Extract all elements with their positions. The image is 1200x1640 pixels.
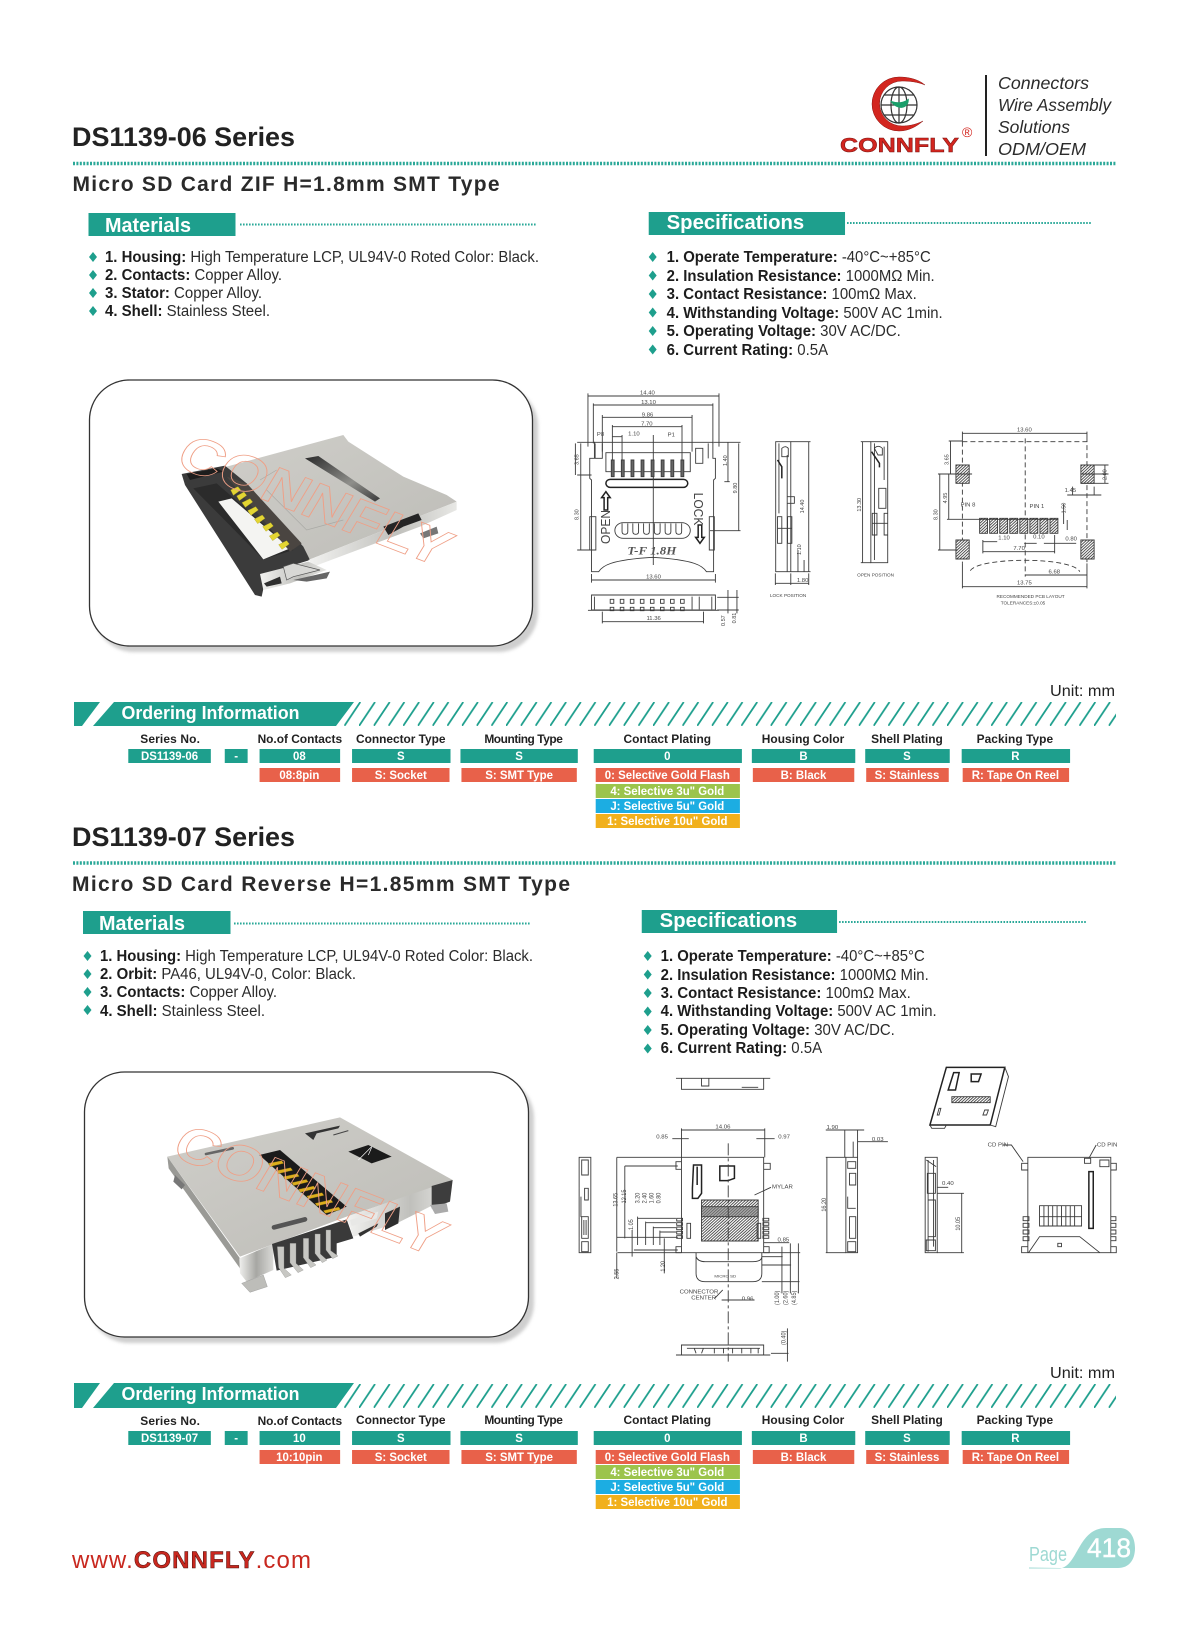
icon: globe — [881, 87, 917, 123]
specification list: 4. Withstanding Voltage: 500V AC 1min. — [661, 1003, 937, 1020]
pcb layout: 0.10 — [1033, 535, 1045, 541]
top view: 1.10 — [628, 431, 640, 437]
main top view: 0.85 — [778, 1238, 789, 1244]
code row: 08 — [293, 751, 306, 763]
connector photo — [182, 435, 457, 597]
column headers: Mounting Type — [484, 1413, 563, 1427]
frame — [90, 380, 532, 646]
specification list: 3. Contact Resistance: 100mΩ Max. — [661, 985, 911, 1002]
main top view: 0.97 — [778, 1135, 790, 1140]
side view: lock position: 14.40 — [800, 500, 806, 513]
option row: S: SMT Type — [485, 1452, 553, 1464]
option row — [260, 1450, 1069, 1464]
specification list: 5. Operating Voltage: 30V AC/DC. — [667, 323, 901, 340]
code row: 0 — [664, 751, 670, 763]
logo: Connfly — [840, 77, 973, 157]
specification list: 6. Current Rating: 0.5A — [667, 342, 829, 359]
top view: P1 — [668, 433, 675, 439]
column headers: Connector Type — [356, 732, 446, 746]
pcb layout: 13.75 — [1017, 581, 1032, 587]
pcb layout: TOLERANCES:±0.05 — [1001, 601, 1046, 606]
technical drawing 2 — [579, 1067, 1117, 1362]
plating options: J: Selective 5u" Gold — [610, 801, 724, 813]
column headers: Series No. — [140, 1414, 200, 1428]
top view: 8.30 — [574, 509, 581, 520]
left side view — [579, 1157, 591, 1253]
bullets — [89, 252, 97, 316]
side view: open position: OPEN POSITION — [857, 573, 894, 578]
unit label 2: Unit: mm — [1050, 1365, 1115, 1382]
material list: 2. Contacts: Copper Alloy. — [105, 267, 282, 284]
watermark: CONNFLY — [167, 425, 463, 578]
option row: 10:10pin — [276, 1452, 323, 1464]
page label: Page — [1029, 1544, 1067, 1566]
panel: product photo 2 — [84, 1072, 534, 1343]
pcb layout: 8.30 — [933, 509, 940, 520]
pcb layout: 1.50 — [1061, 503, 1067, 513]
main top view: 3.20 — [635, 1193, 642, 1203]
subtitle: Micro SD Card Reverse H=1.85mm SMT Type — [72, 873, 570, 896]
footer website: www.CONNFLY.com — [71, 1547, 311, 1574]
main top view: CONNECTOR — [680, 1290, 718, 1295]
top view: 13.10 — [641, 400, 656, 406]
front view — [588, 590, 739, 626]
panel: specifications 2 — [642, 910, 1086, 1057]
cross-section view — [925, 1157, 964, 1253]
top view: 9.86 — [642, 412, 653, 418]
code row: S — [903, 1433, 911, 1445]
column headers: Packing Type — [977, 732, 1054, 746]
cross-section view: 10.05 — [956, 1217, 962, 1231]
main top view: 12.15 — [622, 1190, 628, 1203]
frame shadow — [89, 1078, 534, 1343]
icon: green leaf — [892, 100, 908, 107]
pcb layout: 1.10 — [998, 535, 1010, 541]
material list: 4. Shell: Stainless Steel. — [105, 303, 270, 320]
dotted rule — [73, 162, 1116, 165]
technical drawing 1 — [574, 390, 1108, 626]
side view: lock position — [770, 442, 811, 598]
main top view: MICRO SD — [714, 1274, 736, 1278]
pcb layout: 2.00 — [1102, 469, 1108, 480]
panel: materials 1 — [88, 213, 539, 320]
tagline — [998, 73, 1112, 159]
column headers: No.of Contacts — [258, 732, 342, 746]
option row: B: Black — [781, 1452, 827, 1464]
ordering banner 2: Ordering Information — [122, 1383, 300, 1404]
plating options: 4: Selective 3u" Gold — [610, 1467, 724, 1479]
top view: 7.70 — [641, 421, 653, 427]
code row: 0 — [664, 1433, 670, 1445]
option row: R: Tape On Reel — [972, 770, 1059, 782]
heading: materials: Materials — [105, 215, 191, 237]
registered mark: ® — [962, 124, 973, 140]
specification list: 2. Insulation Resistance: 1000MΩ Min. — [667, 268, 935, 285]
title: DS1139-06 Series: DS1139-06 Series — [72, 122, 295, 152]
column headers: Shell Plating — [871, 1413, 943, 1427]
heading: specifications: Specifications — [660, 910, 797, 932]
pcb layout: RECOMMENDED PCB LAYOUT — [996, 594, 1065, 599]
code row: S — [515, 751, 523, 763]
ordering banner 1: Ordering Information — [122, 702, 300, 723]
material list: 1. Housing: High Temperature LCP, UL94V-0 Roted Color: Black. — [100, 948, 533, 965]
right side view — [822, 1125, 888, 1253]
page tab — [1029, 1528, 1135, 1568]
main top view: 2.55 — [614, 1269, 621, 1279]
top view: LOCK — [691, 493, 705, 526]
code row: B — [799, 751, 808, 763]
material list: 3. Contacts: Copper Alloy. — [100, 984, 277, 1001]
main top view: 1.20 — [661, 1261, 667, 1272]
specification list: 6. Current Rating: 0.5A — [661, 1040, 823, 1057]
main top view: 14.06 — [715, 1125, 731, 1130]
main top view: CENTER — [691, 1296, 716, 1302]
card direction labels: OPEN — [599, 510, 613, 544]
code row: - — [234, 751, 238, 763]
dimensions — [575, 393, 741, 583]
frame shadow — [94, 386, 538, 652]
frame — [84, 1072, 528, 1337]
heading: materials — [83, 911, 230, 935]
specification list: 5. Operating Voltage: 30V AC/DC. — [661, 1022, 895, 1039]
material list — [105, 249, 539, 320]
side view: lock position: LOCK POSITION — [770, 593, 806, 598]
main top view: (2.60) — [783, 1291, 790, 1305]
main top view: (1.00) — [775, 1291, 781, 1305]
code row: R — [1011, 751, 1020, 763]
cross-section view: 0.40 — [942, 1181, 954, 1187]
tagline: Solutions — [998, 117, 1070, 137]
pcb layout: 0.80 — [1065, 537, 1077, 543]
title: DS1139-07 Series: DS1139-07 Series — [72, 822, 295, 852]
side view: open position: 13.30 — [857, 498, 863, 512]
specification list: 3. Contact Resistance: 100mΩ Max. — [667, 286, 917, 303]
plating options: 4: Selective 3u" Gold — [610, 786, 724, 798]
option row: R: Tape On Reel — [972, 1452, 1059, 1464]
heading: materials — [88, 213, 236, 237]
code row — [128, 1431, 1070, 1445]
main top view: 0.85 — [656, 1135, 668, 1140]
option row: 0: Selective Gold Flash — [605, 770, 730, 782]
code row — [128, 749, 1070, 763]
bullets — [649, 252, 657, 354]
option row: 08:8pin — [279, 770, 319, 782]
code row: 10 — [293, 1433, 306, 1445]
technical drawing 2: (0.40) — [781, 1331, 788, 1345]
subtitle: Micro SD Card ZIF H=1.8mm SMT Type — [72, 173, 500, 196]
code row: S — [397, 1433, 405, 1445]
material list: 3. Stator: Copper Alloy. — [105, 285, 262, 302]
front view: 11.36 — [646, 616, 661, 622]
main top view: 0.96 — [742, 1297, 753, 1302]
dotted rule — [73, 861, 1116, 865]
code row: B — [799, 1433, 808, 1445]
ordering banner 1 — [74, 702, 1116, 726]
icon: red C ring — [872, 77, 925, 131]
specification list: 1. Operate Temperature: -40°C~+85°C — [667, 249, 931, 266]
material list: 1. Housing: High Temperature LCP, UL94V-0 Roted Color: Black. — [105, 249, 539, 266]
ordering table 2 — [128, 1413, 1070, 1509]
option row: B: Black — [781, 770, 827, 782]
top view — [574, 390, 741, 583]
main top view: 0.80 — [656, 1193, 663, 1203]
plating options: J: Selective 5u" Gold — [610, 1482, 724, 1494]
front view: 0.81 — [732, 613, 738, 623]
watermark: CONNFLY — [163, 1115, 457, 1267]
side view: lock position: 1.10 — [797, 544, 803, 555]
option row: S: Socket — [375, 770, 427, 782]
top view: 13.60 — [646, 575, 661, 581]
column headers: Mounting Type — [484, 732, 563, 746]
plating options: 1: Selective 10u" Gold — [607, 816, 727, 828]
code row: DS1139-07 — [141, 1433, 198, 1445]
top view: 3.65 — [574, 454, 581, 465]
main top view: 1.05 — [629, 1219, 635, 1230]
pcb layout: PIN 1 — [1030, 504, 1044, 510]
right side view: 16.20 — [822, 1198, 828, 1212]
column headers: Contact Plating — [624, 732, 711, 746]
top view: 1.40 — [723, 455, 729, 466]
specification list: 1. Operate Temperature: -40°C~+85°C — [661, 948, 925, 965]
plating options — [596, 784, 740, 828]
top view: 9.80 — [733, 483, 739, 493]
column headers: Contact Plating — [624, 1413, 711, 1427]
main top view: MYLAR — [772, 1185, 793, 1191]
code row: S — [515, 1433, 523, 1445]
option row — [260, 768, 1069, 782]
option row: 0: Selective Gold Flash — [605, 1452, 730, 1464]
specification list — [667, 249, 943, 359]
bottom view: CD PIN — [1097, 1143, 1117, 1148]
material list: 2. Orbit: PA46, UL94V-0, Color: Black. — [100, 966, 356, 983]
pcb layout: PIN 8 — [961, 503, 975, 509]
main top view — [613, 1125, 800, 1362]
option row: S: SMT Type — [485, 770, 553, 782]
main top view: 1.60 — [649, 1193, 656, 1203]
material list: 4. Shell: Stainless Steel. — [100, 1003, 265, 1020]
side view: lock position: 1.80 — [797, 578, 808, 584]
wordmark: CONNFLY — [840, 135, 960, 157]
unit label 1: Unit: mm — [1050, 683, 1115, 700]
column headers: Housing Color — [762, 732, 845, 746]
specification list — [661, 948, 937, 1057]
pcb layout: 6.68 — [1049, 569, 1060, 575]
column headers: Shell Plating — [871, 732, 943, 746]
heading: materials: Materials — [99, 913, 185, 935]
divider — [985, 75, 987, 156]
column headers — [140, 732, 1054, 746]
column headers: Packing Type — [977, 1413, 1054, 1427]
bottom edge view — [676, 1328, 789, 1362]
panel: product photo 1 — [90, 380, 538, 652]
code row: S — [903, 751, 911, 763]
front view: 0.57 — [721, 615, 727, 626]
heading: specifications — [649, 212, 845, 235]
ordering table 1 — [128, 732, 1070, 828]
code row: R — [1011, 1433, 1020, 1445]
option row: S: Stainless — [875, 770, 939, 782]
bottom view: CD PIN — [988, 1143, 1008, 1149]
pcb layout — [933, 427, 1108, 606]
page marker — [1029, 1528, 1135, 1568]
top view: P8 — [597, 432, 604, 438]
page number: 418 — [1087, 1533, 1131, 1563]
pcb layout: 7.70 — [1013, 546, 1025, 552]
panel: specifications 1 — [649, 212, 1091, 359]
column headers: Series No. — [140, 732, 200, 746]
column headers — [140, 1413, 1054, 1428]
bottom view — [988, 1143, 1117, 1253]
ordering banner 2 — [74, 1383, 1116, 1408]
tagline: ODM/OEM — [998, 139, 1086, 159]
specification list: 4. Withstanding Voltage: 500V AC 1min. — [667, 305, 943, 322]
right side view: 1.90 — [827, 1125, 838, 1131]
option row: S: Stainless — [875, 1452, 939, 1464]
main top view: 13.65 — [613, 1193, 620, 1207]
code row: - — [234, 1433, 238, 1445]
column headers: Housing Color — [762, 1413, 845, 1427]
right side view: 0.03 — [872, 1137, 884, 1143]
option row: S: Socket — [375, 1452, 427, 1464]
connector photo — [167, 1117, 453, 1292]
material list — [100, 948, 533, 1020]
tagline: Connectors — [998, 73, 1089, 93]
plating options — [596, 1465, 740, 1509]
tagline: Wire Assembly — [998, 95, 1112, 115]
column headers: No.of Contacts — [258, 1414, 342, 1428]
bullets — [644, 951, 652, 1054]
3d view — [930, 1067, 1008, 1128]
pcb layout: 4.95 — [943, 493, 949, 503]
heading: specifications — [642, 910, 837, 933]
panel: materials 2 — [83, 911, 533, 1020]
plating options: 1: Selective 10u" Gold — [607, 1497, 727, 1509]
pcb layout: 13.60 — [1017, 427, 1032, 433]
top view: T-F 1.8H — [627, 544, 678, 558]
bullets — [84, 951, 92, 1015]
main top view: (4.85) — [792, 1291, 798, 1305]
column headers: Connector Type — [356, 1413, 446, 1427]
code row: DS1139-06 — [141, 751, 198, 763]
top edge view — [676, 1078, 770, 1089]
heading: specifications: Specifications — [667, 212, 804, 234]
top view: 14.40 — [640, 390, 655, 396]
dimensions — [617, 1128, 800, 1300]
main top view: 2.40 — [643, 1193, 649, 1203]
pcb layout: 3.65 — [945, 454, 951, 465]
code row: S — [397, 751, 405, 763]
specification list: 2. Insulation Resistance: 1000MΩ Min. — [661, 967, 929, 984]
side view: open position — [857, 442, 894, 578]
pcb layout: 1.45 — [1065, 488, 1076, 494]
